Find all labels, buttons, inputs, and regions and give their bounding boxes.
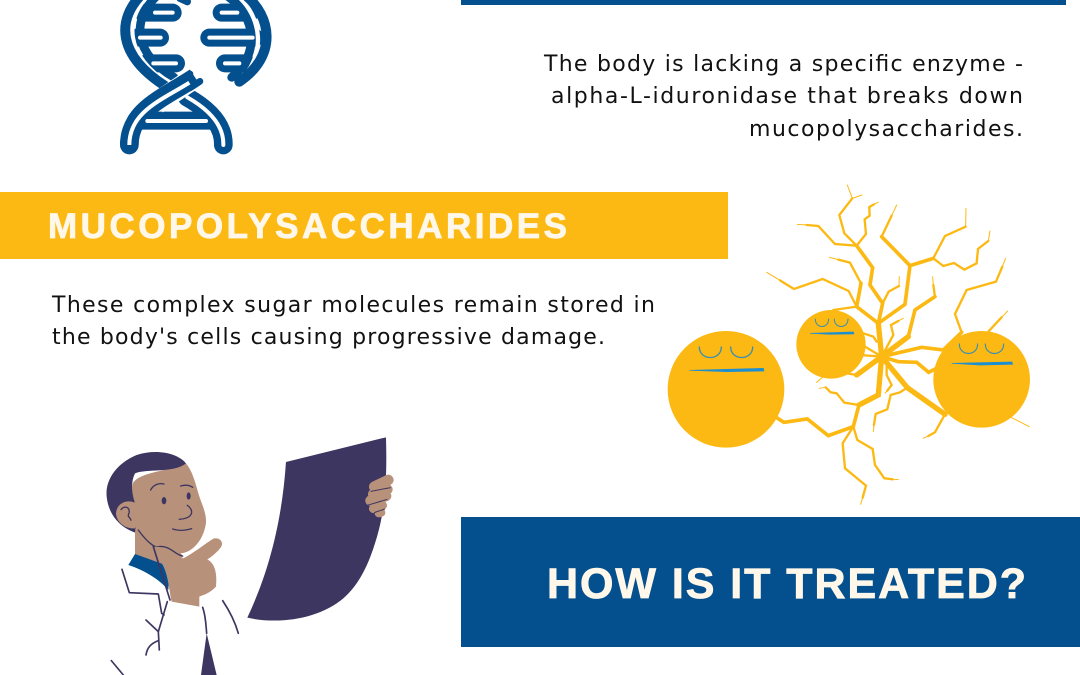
text: sugar molecules description: the body's cells causing progressive damage. xyxy=(52,325,605,350)
blue collar xyxy=(128,554,170,590)
coat opening xyxy=(201,633,217,675)
text: enzyme explanation xyxy=(543,52,1023,142)
cracks: thick trunks xyxy=(857,323,945,414)
text: enzyme explanation: The body is lacking a specific enzyme - xyxy=(543,52,1023,77)
icon: DNA helix xyxy=(125,0,267,145)
x-ray sheet xyxy=(247,437,386,621)
heading panel: how is it treated: HOW IS IT TREATED? xyxy=(547,560,1026,608)
text: enzyme explanation: mucopolysaccharides. xyxy=(749,117,1023,142)
heading panel: how is it treated xyxy=(461,517,1080,647)
text: sugar molecules description xyxy=(51,293,655,350)
ear xyxy=(116,501,138,528)
hand on chin xyxy=(154,538,222,607)
text: enzyme explanation: alpha-L-iduronidase that breaks down xyxy=(551,84,1023,109)
heading banner: mucopolysaccharides xyxy=(0,192,728,259)
cracks: thin twigs xyxy=(780,198,1002,498)
hand on sheet xyxy=(367,480,391,513)
cell: right xyxy=(933,331,1030,428)
cell: small centre xyxy=(796,310,866,379)
text: sugar molecules description: These complex sugar molecules remain stored in xyxy=(51,293,655,318)
neck xyxy=(135,530,183,567)
illustration: doctor reading an x-ray xyxy=(107,437,391,675)
face xyxy=(131,463,206,553)
top blue banner edge xyxy=(461,0,1066,5)
facial features xyxy=(138,484,193,556)
heading banner: mucopolysaccharides: MUCOPOLYSACCHARIDES xyxy=(48,207,567,246)
hair xyxy=(107,452,186,533)
cracks: medium branches xyxy=(777,237,962,436)
illustration: damaged cells with cracks xyxy=(668,185,1030,504)
cell: large left xyxy=(668,331,784,448)
cracks: fine tapered tips xyxy=(767,185,1029,504)
coat details xyxy=(111,547,238,675)
